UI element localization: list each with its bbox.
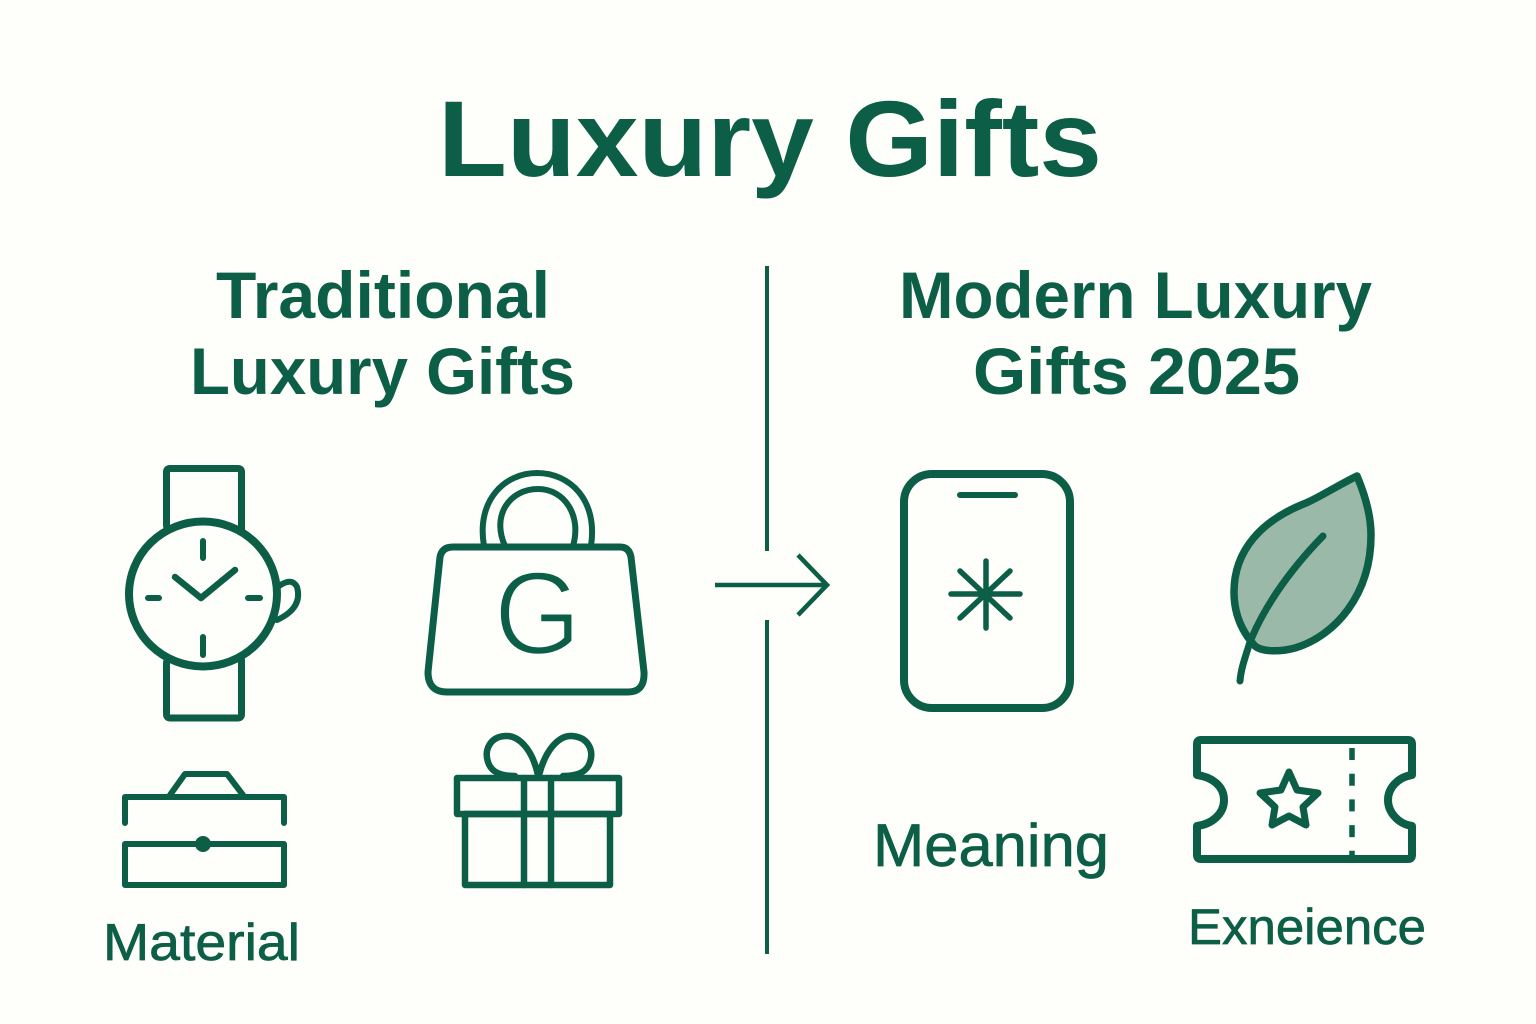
logo letter: G — [494, 548, 581, 680]
icon: ticket — [1197, 740, 1412, 859]
heading: traditional luxury gifts: Luxury Gifts — [190, 334, 575, 408]
icon: phone — [904, 474, 1070, 708]
heading: modern luxury gifts 2025: Modern Luxury — [899, 258, 1372, 332]
center divider — [765, 266, 769, 954]
heading: traditional luxury gifts — [190, 258, 575, 408]
icon: leaf — [1234, 476, 1371, 681]
heading: modern luxury gifts 2025 — [899, 258, 1372, 408]
heading: modern luxury gifts 2025: Gifts 2025 — [973, 334, 1300, 408]
label: experience: Exneience — [1188, 899, 1426, 955]
title: Luxury Gifts — [438, 78, 1102, 199]
icon: watch — [129, 468, 298, 718]
heading: traditional luxury gifts: Traditional — [216, 258, 550, 332]
icon: gift box — [457, 736, 619, 885]
icon: briefcase — [125, 774, 284, 885]
label: meaning: Meaning — [873, 812, 1109, 879]
arrow — [715, 555, 827, 615]
icon: handbag — [428, 473, 644, 692]
label: material: Material — [103, 914, 300, 972]
